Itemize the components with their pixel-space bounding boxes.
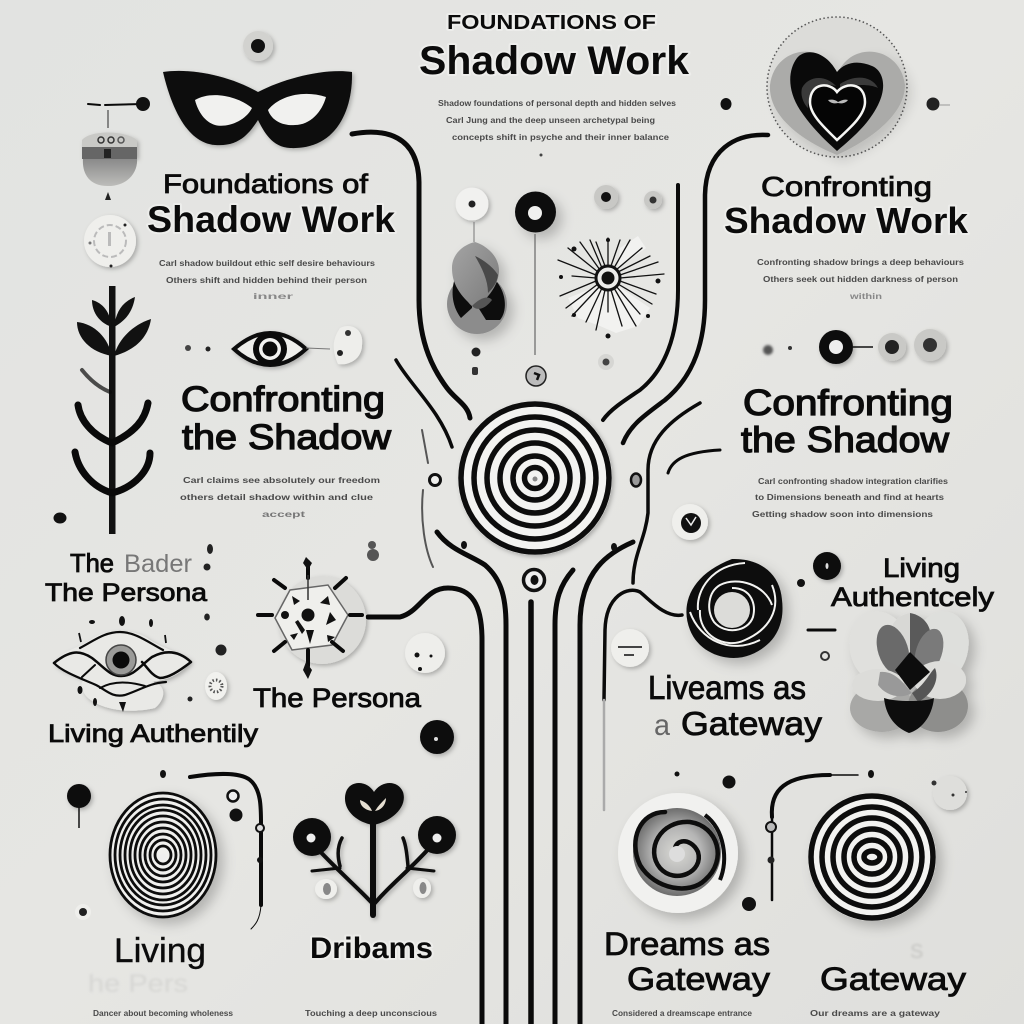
faint ghost label: he Pers <box>88 970 188 998</box>
heading: foundations of shadow work left: Shadow Work <box>147 199 395 240</box>
main title: Shadow Work <box>419 39 690 83</box>
text block right: within <box>849 291 882 301</box>
icon: tick disc <box>672 504 708 540</box>
icon: knot <box>447 242 507 334</box>
heading: the bader the persona: Bader <box>124 550 192 578</box>
heading: the persona centre: The Persona <box>253 683 422 713</box>
heading: confronting the shadow right: Confronting <box>743 382 953 423</box>
connector with beads <box>766 770 874 900</box>
small dots around spiral <box>674 772 756 911</box>
heading: confronting the shadow left <box>181 380 392 457</box>
icon dots column <box>188 544 226 702</box>
small rings and drops around centre <box>430 474 641 551</box>
text block confronting right: Carl confronting shadow integration clarifies <box>758 476 948 486</box>
main title: FOUNDATIONS OF <box>447 12 656 34</box>
icon: dot near plant <box>54 512 66 524</box>
icon: lotus <box>841 604 977 733</box>
heading: foundations of shadow work left: Foundations of <box>163 169 369 199</box>
icon: capsule with connector <box>82 97 150 200</box>
heading: the bader the persona: The <box>70 548 114 578</box>
icon: white dotted pebble <box>205 672 227 700</box>
heading: dribams: Dribams <box>310 932 433 965</box>
icon: white gear <box>84 215 136 268</box>
cluster: top centre icons <box>447 185 664 386</box>
intro text block: Shadow foundations of personal depth and hidden selves <box>438 98 676 108</box>
text block confronting left: others detail shadow within and clue <box>180 492 373 502</box>
icon: black ring <box>515 192 556 232</box>
text block confronting right: to Dimensions beneath and find at hearts <box>755 492 944 502</box>
heading: confronting shadow work right: Confronting <box>761 171 932 202</box>
heading: living authentcely: Living <box>883 553 960 583</box>
icon: eye row <box>185 326 362 366</box>
icon: persona wheel <box>258 557 366 679</box>
text block confronting left: Carl claims see absolutely our freedom <box>183 475 381 485</box>
icon: black disc <box>420 720 454 754</box>
heading: living authentily: Living Authentily <box>48 720 259 748</box>
caption row bottom: Touching a deep unconscious <box>305 1008 437 1018</box>
dots below knot <box>472 348 480 375</box>
caption row bottom: Considered a dreamscape entrance <box>612 1008 752 1018</box>
heading: liveams as a gateway: Gateway <box>681 705 823 742</box>
heading: liveams as a gateway: a <box>654 709 670 742</box>
icon: white disc <box>456 188 488 242</box>
small marks beside fingerprint <box>75 770 264 929</box>
heading: confronting the shadow left: the Shadow <box>182 418 392 457</box>
text block right <box>757 257 964 301</box>
icon: spiral disc <box>618 793 738 913</box>
heading: confronting shadow work right: Shadow Work <box>724 200 969 241</box>
heading: confronting shadow work right <box>724 171 969 241</box>
icon: plant <box>75 286 151 534</box>
caption row bottom: Dancer about becoming wholeness <box>93 1008 233 1018</box>
icon: persona lips eye <box>54 616 191 712</box>
text block left: Carl shadow buildout ethic self desire behaviours <box>159 258 375 268</box>
icon: heart with dotted halo <box>767 17 907 157</box>
icon: white disc with marks <box>611 629 649 667</box>
heading: living authentcely <box>831 553 995 612</box>
intro text block: Carl Jung and the deep unseen archetypal being <box>446 115 655 125</box>
thin stem <box>534 234 536 355</box>
heading: the bader the persona: The Persona <box>45 579 207 607</box>
heading: liveams as a gateway <box>648 669 823 742</box>
icon: heart tree <box>293 783 456 915</box>
icon: small stem ring <box>526 366 546 386</box>
heading: dreams as gateway: Gateway <box>627 961 770 997</box>
icon: mask <box>163 71 352 148</box>
icon: flower <box>558 236 664 338</box>
icon row: rings right <box>763 329 946 364</box>
icon: small dots right <box>797 552 841 660</box>
text block confronting right: Getting shadow soon into dimensions <box>752 509 933 519</box>
heading: dreams as gateway <box>604 926 770 997</box>
heading: living authentcely: Authentcely <box>831 582 995 612</box>
icon: small eye ring <box>524 570 544 590</box>
icon: blob <box>367 541 379 561</box>
caption row bottom: Our dreams are a gateway <box>810 1008 940 1018</box>
main title <box>419 12 690 83</box>
heading: living: Living <box>114 932 206 970</box>
icon: black dot left bottom <box>67 784 91 828</box>
heading: dreams as gateway: Dreams as <box>604 926 770 962</box>
connector lines <box>352 132 768 1024</box>
text block confronting left <box>180 475 381 519</box>
intro text block <box>438 98 676 156</box>
icon: white disc with dots <box>405 633 445 673</box>
text block left: inner <box>253 291 294 301</box>
heading: confronting the shadow right <box>741 382 953 460</box>
heading: confronting the shadow left: Confronting <box>181 380 385 419</box>
heading: foundations of shadow work left <box>147 169 395 240</box>
text block right: Confronting shadow brings a deep behaviours <box>757 257 964 267</box>
text block confronting left: accept <box>262 509 305 519</box>
text block right: Others seek out hidden darkness of person <box>763 274 958 284</box>
heading: confronting the shadow right: the Shadow <box>741 419 950 460</box>
icon: concentric circles right <box>808 793 936 921</box>
text block left: Others shift and hidden behind their person <box>166 275 367 285</box>
icon: central concentric spiral <box>458 401 612 555</box>
icon: heart flank dots <box>720 98 950 110</box>
heading: the bader the persona <box>45 548 207 607</box>
heading: gateway: Gateway <box>820 961 966 997</box>
icon: white disc top right <box>932 776 967 810</box>
faint ghost letter: S <box>910 941 923 963</box>
icon: small dot on disc <box>243 31 273 61</box>
caption row bottom <box>93 1008 940 1018</box>
text block left <box>159 258 375 301</box>
heading: liveams as a gateway: Liveams as <box>648 669 806 706</box>
intro text block: concepts shift in psyche and their inner balance <box>452 132 669 142</box>
text block confronting right <box>752 476 948 519</box>
icon: fingerprint <box>109 792 217 918</box>
icon: black spiral rose <box>686 559 783 658</box>
icons: top right discs <box>594 185 662 370</box>
